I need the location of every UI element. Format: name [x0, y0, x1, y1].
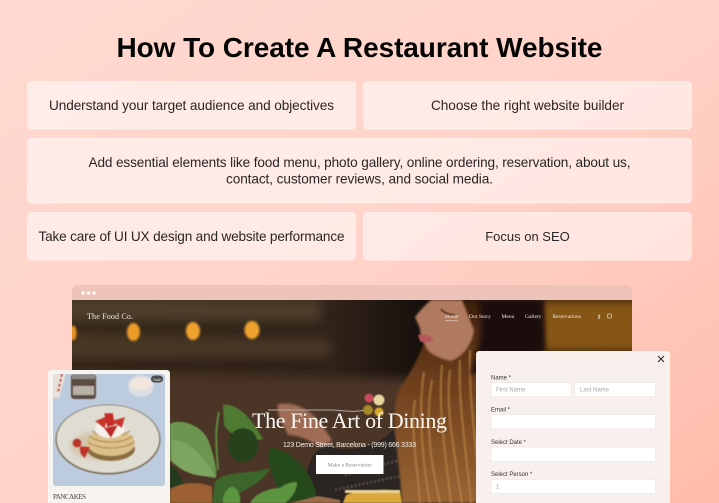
- step: essential elements: Add essential elements like food menu, photo gallery, online ordering, reservation, about us,: [88, 155, 630, 170]
- navigation: [445, 314, 612, 321]
- reservation button: Make a Reservation: [328, 462, 372, 468]
- face: [415, 300, 474, 361]
- brand logo: The Food Co.: [87, 312, 133, 321]
- plate: [56, 404, 160, 474]
- name field: [491, 376, 656, 396]
- jam jar: [71, 374, 96, 399]
- email field: Email *: [491, 408, 511, 414]
- step: essential elements: contact, customer reviews, and social media.: [226, 172, 493, 186]
- step: SEO: [364, 212, 692, 260]
- navigation: Home: [445, 314, 459, 320]
- browser mockup: [60, 285, 640, 503]
- reservation form modal: [476, 351, 670, 503]
- bowl foreground: [290, 490, 402, 503]
- pancakes: [87, 446, 136, 462]
- person field: [491, 472, 656, 494]
- title: How To Create A Restaurant Website: [116, 32, 602, 63]
- close icon: [658, 356, 664, 362]
- sweater: [300, 430, 425, 503]
- menu item card: [48, 370, 170, 503]
- step: SEO: Focus on SEO: [485, 229, 570, 244]
- plants: [170, 405, 316, 503]
- hero heading: The Fine Art of Dining: [252, 408, 447, 433]
- name field: Name *: [491, 376, 512, 382]
- navigation: Reservations: [552, 314, 581, 320]
- hand and fork: [278, 403, 332, 448]
- name field: First Name: [496, 388, 526, 394]
- name field: Last Name: [580, 388, 610, 394]
- step: UI UX design: [28, 212, 356, 260]
- steps panel: [28, 82, 692, 260]
- step: website builder: [364, 82, 692, 129]
- date field: [491, 440, 656, 462]
- navigation: Gallery: [525, 314, 542, 320]
- menu item name: PANCAKES: [53, 493, 86, 501]
- cream bowl: [128, 375, 154, 397]
- address line: 123 Demo Street, Barcelona - (999) 666 3333: [283, 442, 416, 449]
- step: target audience: [28, 82, 356, 129]
- reservation button: [316, 455, 384, 474]
- email field: [491, 408, 656, 429]
- browser title bar: [72, 285, 632, 300]
- navigation: Menu: [502, 314, 515, 320]
- copper pot: [170, 483, 212, 503]
- strawberries: [95, 416, 107, 429]
- step: UI UX design: Take care of UI UX design and website performance: [38, 229, 344, 244]
- person field: Select Person *: [491, 472, 533, 478]
- step: essential elements: [28, 138, 692, 203]
- hero overlay copy: [87, 312, 612, 474]
- step: website builder: Choose the right website builder: [431, 98, 624, 113]
- hair: [395, 300, 545, 503]
- person field: 1: [496, 484, 500, 490]
- step: target audience: Understand your target audience and objectives: [49, 98, 334, 113]
- date field: Select Date *: [491, 440, 527, 446]
- navigation: Our Story: [469, 314, 491, 320]
- hero photo: [60, 300, 640, 503]
- bokeh lights: [70, 321, 260, 341]
- sale badge: Sale: [153, 377, 162, 382]
- navigation: f: [598, 314, 601, 321]
